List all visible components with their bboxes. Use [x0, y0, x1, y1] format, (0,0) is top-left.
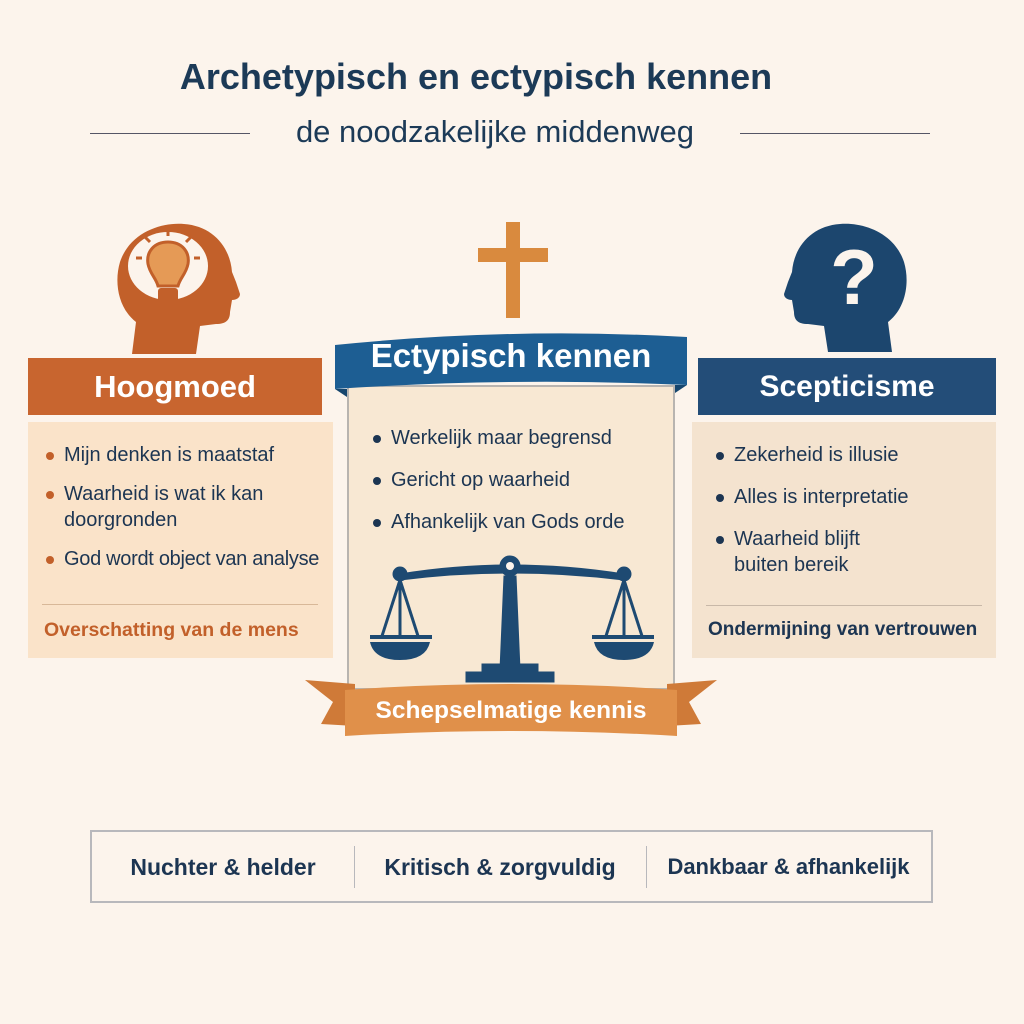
title: Archetypisch en ectypisch kennen	[180, 56, 772, 97]
body: Ectypisch	[347, 385, 675, 690]
header: Hoogmoed	[28, 358, 322, 415]
header: Scepticisme: Scepticisme	[759, 370, 935, 403]
footer: Ondermijning: Ondermijning van vertrouwen	[708, 619, 977, 640]
body: Ectypisch: Afhankelijk van Gods orde	[391, 511, 624, 533]
subtitle: de noodzakelijke middenweg	[296, 114, 694, 149]
body: Scepticisme: buiten bereik	[734, 554, 849, 576]
text: Dankbaar & afhankelijk: Dankbaar & afhankelijk	[667, 854, 910, 879]
icon: head with question mark: ?	[830, 233, 878, 321]
panel: Ectypisch kennen: Ectypisch kennen	[371, 337, 651, 374]
icon: head with question mark	[784, 224, 907, 352]
text: Nuchter & helder: Nuchter & helder	[130, 854, 316, 880]
header: Ectypisch kennen	[335, 333, 687, 397]
body: Hoogmoed: God wordt object van analyse	[64, 548, 319, 570]
ribbon: Schepselmatige kennis	[305, 680, 717, 736]
body: Ectypisch: Gericht op waarheid	[391, 469, 570, 491]
body: Scepticisme: Zekerheid is illusie	[734, 444, 899, 466]
body: Scepticisme	[692, 422, 996, 658]
icon: head with lightbulb	[117, 224, 240, 354]
body: Hoogmoed	[28, 422, 333, 658]
header: Scepticisme	[698, 358, 996, 415]
panel: Hoogmoed	[28, 358, 333, 658]
body: Hoogmoed: Waarheid is wat ik kan doorgronden	[64, 483, 263, 531]
header: Hoogmoed: Hoogmoed	[94, 369, 256, 404]
bottom bar: attitudes	[90, 830, 933, 903]
icon: cross	[478, 222, 548, 318]
body: Ectypisch: Werkelijk maar begrensd	[391, 427, 612, 449]
text: Kritisch & zorgvuldig: Kritisch & zorgvuldig	[384, 854, 616, 880]
panel: Ectypisch kennen	[335, 333, 687, 690]
body: Scepticisme: Alles is interpretatie	[734, 486, 909, 508]
footer: Overschatting: Overschatting van de mens	[44, 619, 299, 641]
icon: scales	[370, 556, 654, 682]
body: Hoogmoed: Mijn denken is maatstaf	[64, 444, 274, 466]
panel: Scepticisme	[692, 358, 996, 658]
body: Scepticisme: Waarheid blijft	[734, 528, 860, 550]
ribbon: Schepselmatige kennis: Schepselmatige kennis	[376, 697, 646, 724]
